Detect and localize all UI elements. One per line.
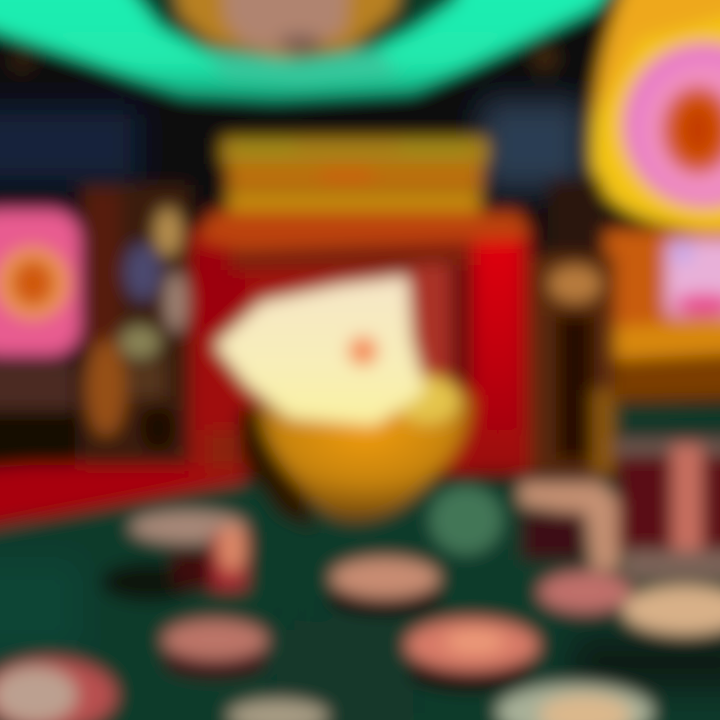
inner curtain xyxy=(230,245,470,270)
orange centre xyxy=(662,86,720,174)
cream popcorn pile xyxy=(215,276,425,425)
red stage frame xyxy=(190,212,532,473)
chip arch xyxy=(520,482,622,570)
teal ceiling band xyxy=(0,0,620,100)
right slot machine xyxy=(592,0,720,432)
chip xyxy=(0,659,116,720)
yellow arch xyxy=(592,0,720,232)
chip xyxy=(539,572,631,612)
bowl shadow xyxy=(238,400,315,530)
bowl highlight xyxy=(396,376,460,424)
machine body xyxy=(605,230,720,355)
chip xyxy=(497,684,653,720)
golden base xyxy=(605,318,720,360)
red carpet xyxy=(0,448,245,530)
chip xyxy=(163,620,267,678)
background wall xyxy=(0,0,720,520)
frame top xyxy=(198,212,532,250)
chip xyxy=(228,700,328,720)
ceiling lights xyxy=(9,45,558,73)
chip xyxy=(327,558,443,616)
chip xyxy=(406,619,538,692)
right chip stacks xyxy=(615,438,720,580)
pink ring xyxy=(623,43,720,207)
golden bowl xyxy=(258,395,472,522)
green table floor xyxy=(0,482,720,720)
left figure xyxy=(80,185,190,465)
yellow sign xyxy=(222,138,488,212)
orange dot xyxy=(348,336,378,366)
red column xyxy=(474,238,522,473)
screen xyxy=(666,240,720,316)
right figure xyxy=(530,178,615,475)
dark green counter xyxy=(612,406,720,432)
chip xyxy=(623,586,720,634)
poker chips xyxy=(0,482,720,720)
green ball xyxy=(430,486,502,554)
left pink slot machine xyxy=(0,210,80,465)
chip xyxy=(100,511,248,602)
